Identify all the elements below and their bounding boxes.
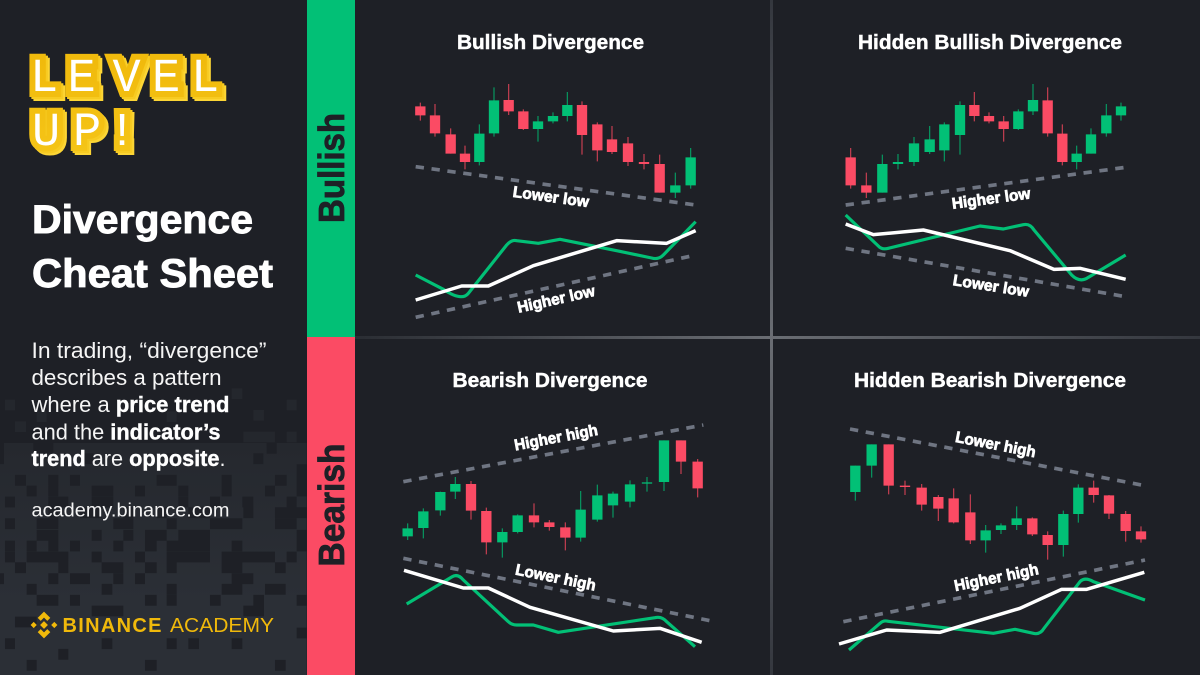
chart (846, 84, 1126, 301)
trendline: price (846, 167, 1126, 205)
price average line (839, 572, 1144, 644)
chart (416, 84, 696, 317)
chart (839, 429, 1145, 650)
description text: describes a pattern (32, 365, 221, 390)
label: lower high: Lower high (954, 429, 1037, 461)
trendline: indicator (843, 560, 1145, 622)
panel: left sidebar (0, 53, 307, 675)
trendline: indicator (846, 248, 1126, 297)
heading: Bearish Divergence (452, 370, 648, 392)
label: lower low: Lower low (512, 184, 591, 211)
logo: Level Up (30, 53, 219, 160)
pixel pattern background (0, 394, 307, 675)
label: lower low: Lower low (952, 272, 1031, 301)
label: higher low: Higher low (516, 283, 597, 317)
label: higher high: Higher high (513, 422, 599, 454)
title: Divergence (32, 198, 253, 242)
price average line (846, 224, 1126, 279)
trendline: indicator (416, 255, 696, 317)
candlesticks (408, 440, 698, 558)
brand logo: Binance Academy (31, 612, 274, 638)
panel: bearish side bar: Bearish (311, 444, 352, 566)
indicator line (846, 215, 1126, 280)
description text: In trading, “divergence” (32, 338, 266, 363)
website url: academy.binance.com (32, 500, 230, 522)
panel: bullish side bar: Bullish (311, 113, 352, 223)
label: higher high: Higher high (953, 561, 1040, 595)
title: Cheat Sheet (32, 252, 273, 296)
description text: trend are opposite. (32, 446, 226, 471)
heading: Bullish Divergence (457, 32, 644, 54)
description text (31, 338, 266, 471)
indicator line (416, 222, 696, 297)
trendline: indicator (403, 558, 710, 621)
panel: bearish divergence (403, 370, 710, 647)
wordmark: BINANCE (62, 615, 162, 637)
trendline: price (403, 425, 703, 482)
title (32, 198, 273, 296)
panel: bullish divergence (416, 32, 696, 317)
wordmark: ACADEMY (170, 615, 274, 637)
trendline: price (850, 429, 1145, 486)
indicator line (849, 579, 1145, 650)
panel: bearish side bar (307, 337, 355, 675)
icon: Binance diamond (31, 612, 57, 638)
description text: where a price trend (31, 392, 230, 417)
price average line (404, 570, 702, 642)
logo: Level Up: UP! (32, 107, 136, 160)
indicator line (407, 576, 695, 647)
heading: Hidden Bullish Divergence (858, 32, 1122, 54)
heading: Hidden Bearish Divergence (854, 370, 1126, 392)
label: higher low: Higher low (951, 185, 1032, 213)
description text: and the indicator’s (32, 420, 220, 444)
panel: hidden bullish divergence (846, 32, 1126, 301)
panel: hidden bearish divergence (839, 370, 1145, 650)
candlesticks (420, 84, 691, 198)
price average line (416, 231, 696, 300)
trendline: price (416, 167, 696, 205)
label: lower high: Lower high (514, 562, 597, 595)
candlesticks (855, 444, 1141, 560)
chart (403, 422, 710, 647)
panel: bullish side bar (307, 0, 355, 337)
candlesticks (851, 84, 1121, 198)
logo: Level Up: LEVEL (30, 53, 219, 106)
